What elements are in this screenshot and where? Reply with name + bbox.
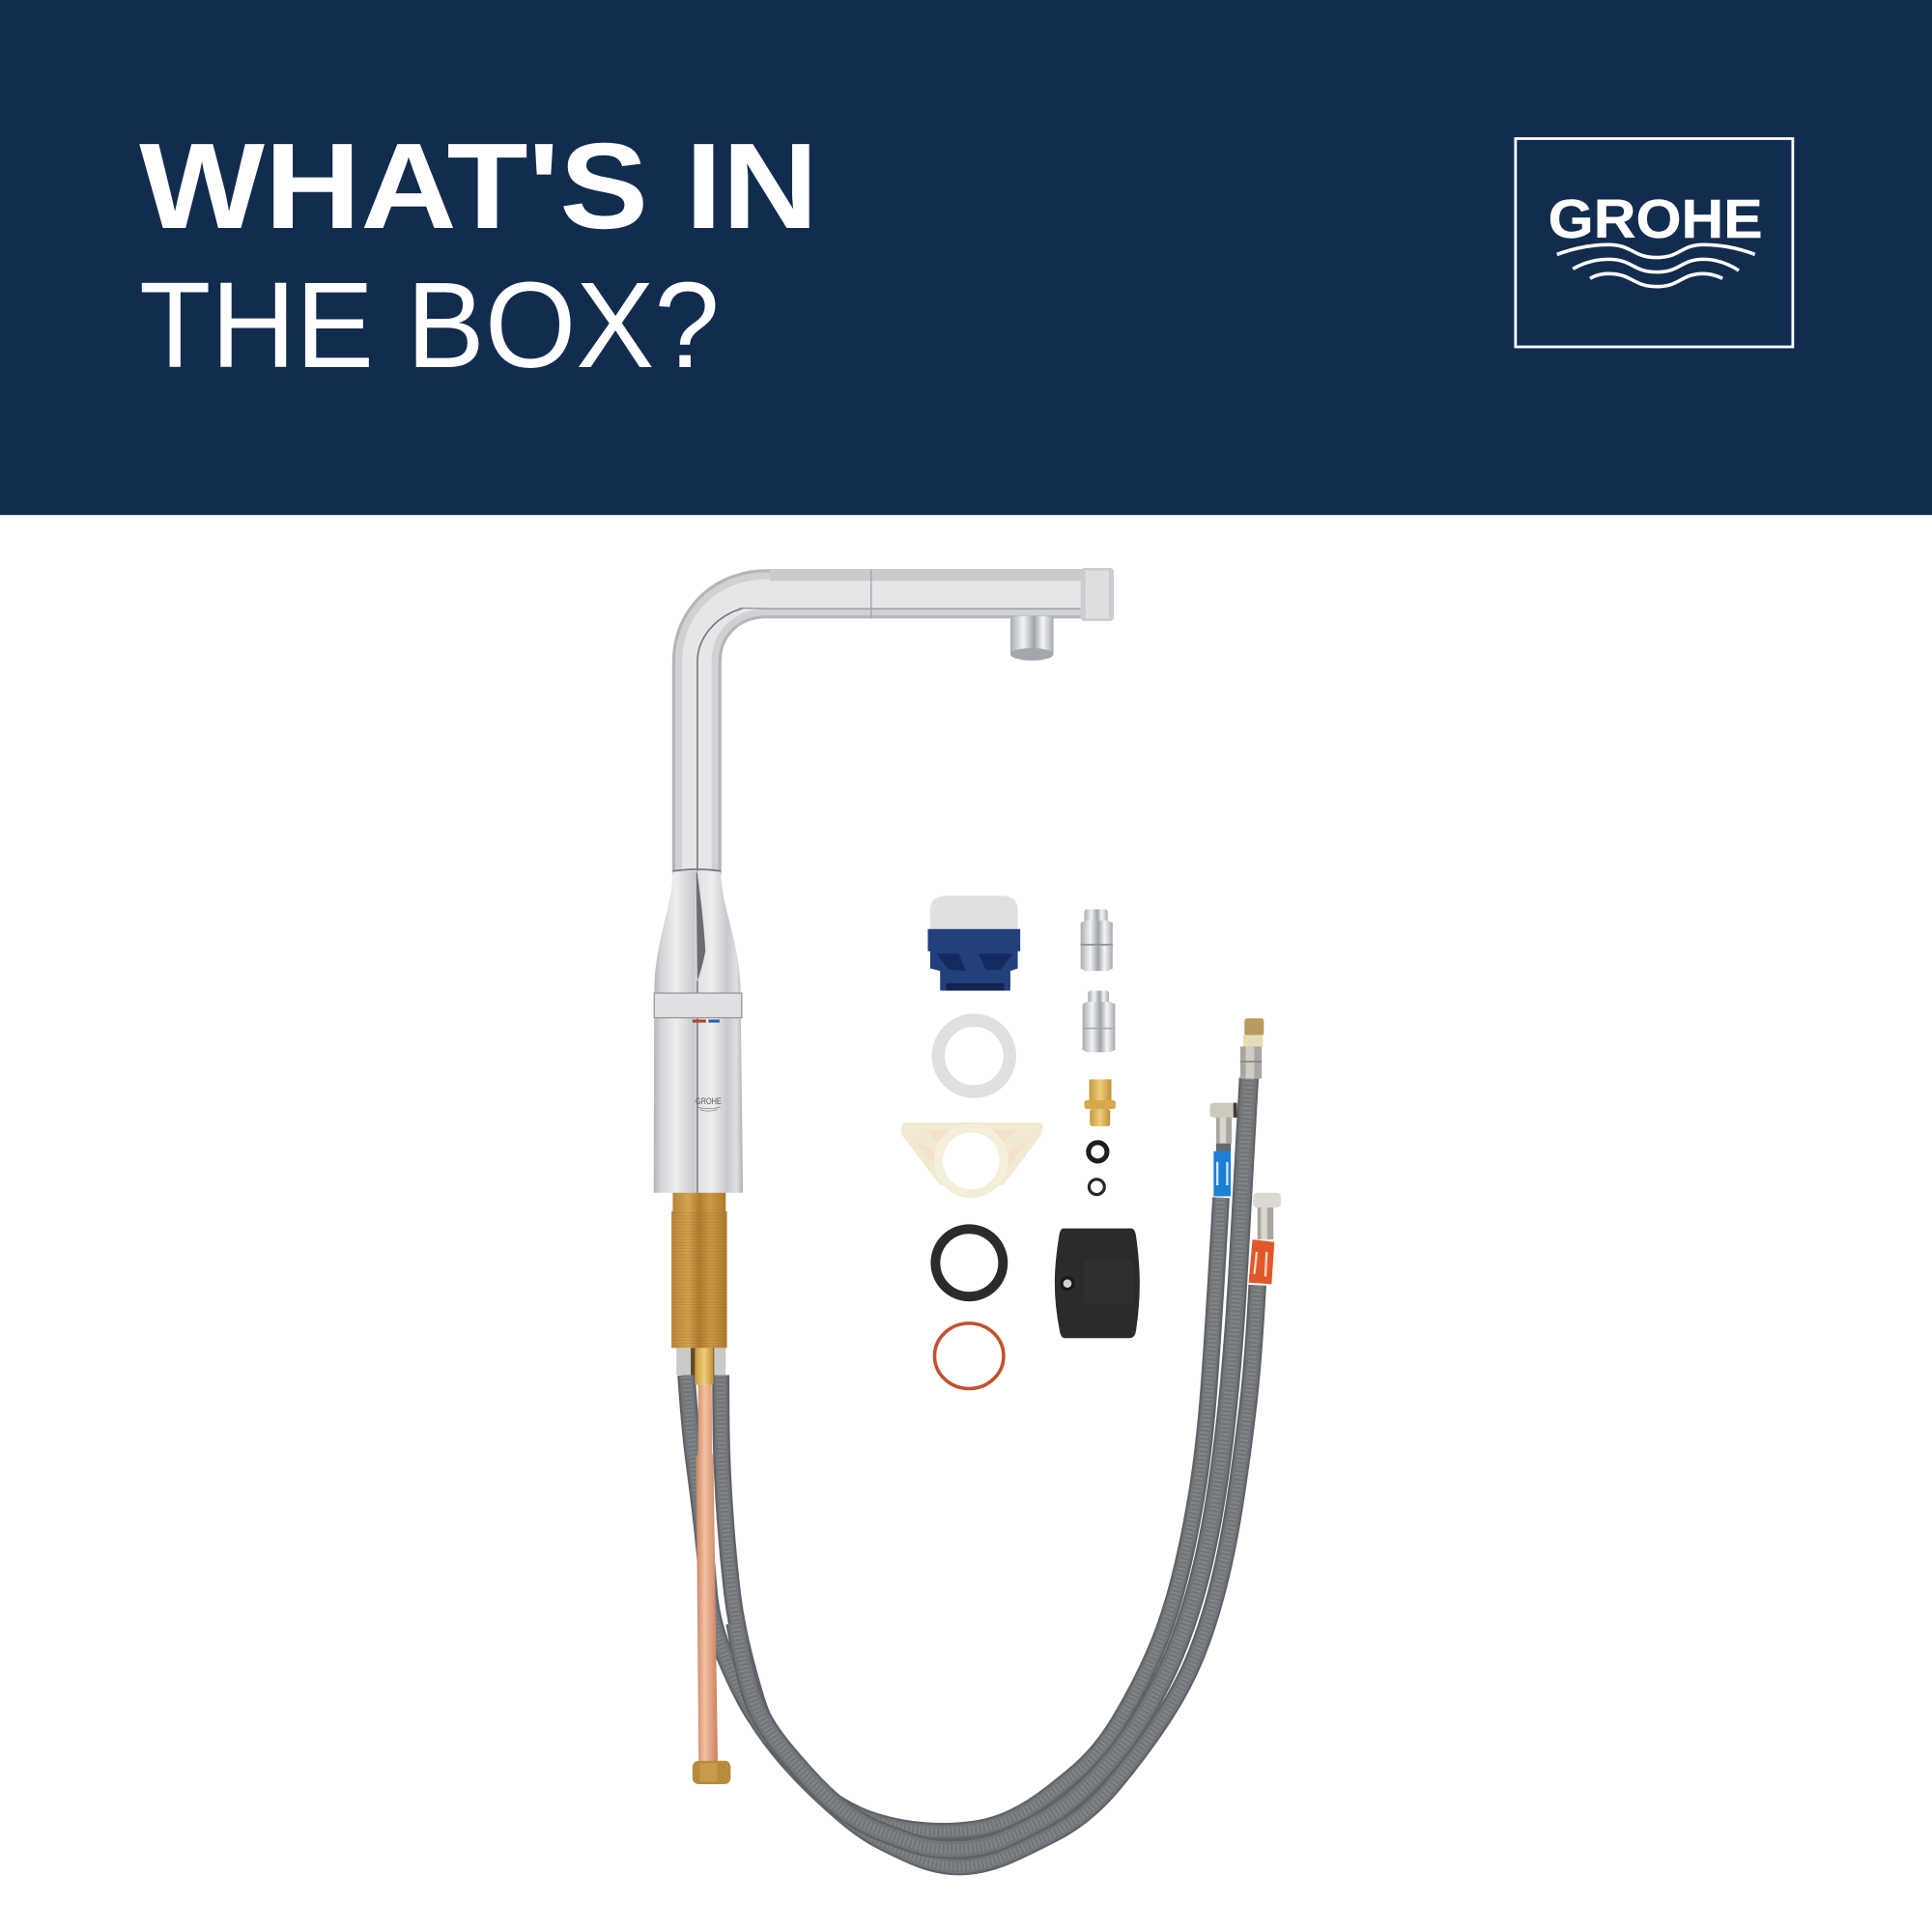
shank connectors — [676, 1348, 725, 1385]
part: brass nipple — [1084, 1079, 1116, 1126]
flexible braided hoses — [686, 1078, 1258, 1866]
small body logo — [696, 1096, 722, 1111]
hot and cold markers — [693, 1019, 720, 1023]
faucet spout — [696, 568, 1114, 875]
part: chrome fitting one — [1081, 909, 1113, 971]
part: small o-ring large — [1089, 1143, 1107, 1161]
part: chrome fitting two — [1083, 991, 1115, 1052]
small body logo: GROHE — [696, 1096, 722, 1107]
brass threaded shank — [671, 1193, 727, 1348]
hose end: orange hot connector — [1249, 1193, 1281, 1284]
title: the box: THE BOX? — [139, 257, 720, 393]
part: small o-ring small — [1089, 1179, 1104, 1195]
knurled lever ring — [654, 993, 742, 1018]
part: grey washer — [938, 1020, 1009, 1092]
logo: GROHE — [1516, 138, 1793, 347]
part: cream mounting bracket — [901, 1122, 1043, 1194]
part: blue and grey adapter — [927, 895, 1020, 991]
hose end: tall with brass tip — [1240, 1018, 1264, 1079]
aerator — [1010, 616, 1054, 661]
logo: GROHE: GROHE — [1548, 188, 1763, 249]
hose end: blue cold connector — [1210, 1103, 1237, 1196]
part: black hose clamp — [1055, 1229, 1140, 1338]
copper tube with brass nut — [693, 1385, 730, 1784]
header banner — [0, 0, 1932, 515]
part: orange o-ring — [934, 1323, 1004, 1389]
spout end cap — [1081, 568, 1114, 621]
title: what's in: WHAT'S IN — [139, 118, 818, 254]
faucet body — [654, 869, 743, 1193]
part: black ring — [935, 1229, 1003, 1296]
